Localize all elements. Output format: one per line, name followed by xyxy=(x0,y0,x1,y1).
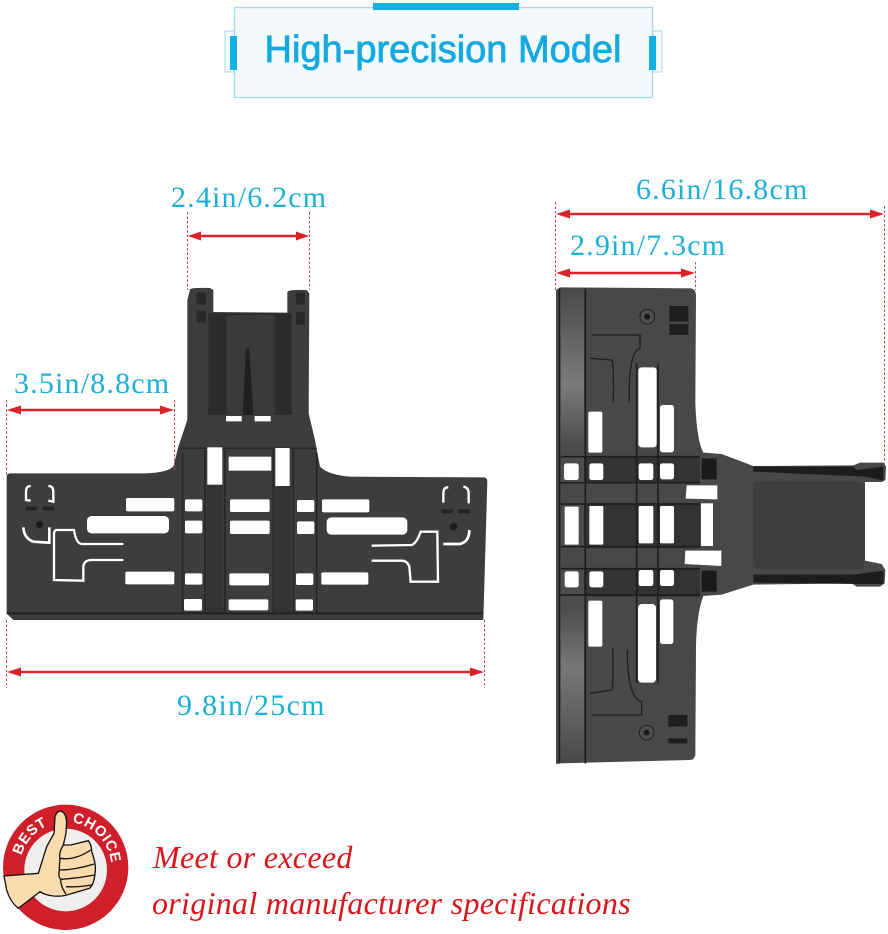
tagline: Meet or exceed xyxy=(152,839,353,875)
tagline: original manufacturer specifications xyxy=(152,885,631,921)
icon: best choice badge: BEST xyxy=(12,816,44,854)
tagline xyxy=(152,839,631,921)
dimension: 2.9in/7.3cm: 2.9in/7.3cm xyxy=(570,229,726,262)
title text: High-precision Model xyxy=(265,29,621,71)
dimension: 9.8in/25cm: 9.8in/25cm xyxy=(177,689,326,722)
dimension: 3.5in/8.8cm xyxy=(6,367,174,476)
slots xyxy=(207,447,222,485)
front view part photo xyxy=(7,288,487,620)
side view part photo xyxy=(556,287,886,764)
dimension: 9.8in/25cm xyxy=(6,620,484,722)
dimension: 2.4in/6.2cm xyxy=(171,181,327,290)
dimension: 3.5in/8.8cm: 3.5in/8.8cm xyxy=(14,367,170,400)
icon: best choice badge xyxy=(3,804,128,930)
white latch cuts xyxy=(54,530,123,581)
title banner xyxy=(225,3,662,98)
dimension: 6.6in/16.8cm xyxy=(556,173,884,465)
dimension: 6.6in/16.8cm: 6.6in/16.8cm xyxy=(636,173,808,206)
neck detail xyxy=(208,313,292,415)
dimension: 2.4in/6.2cm: 2.4in/6.2cm xyxy=(171,181,327,214)
icon: best choice badge: CHOICE xyxy=(74,813,121,862)
slots xyxy=(638,367,657,447)
dimension: 2.9in/7.3cm xyxy=(556,229,726,290)
